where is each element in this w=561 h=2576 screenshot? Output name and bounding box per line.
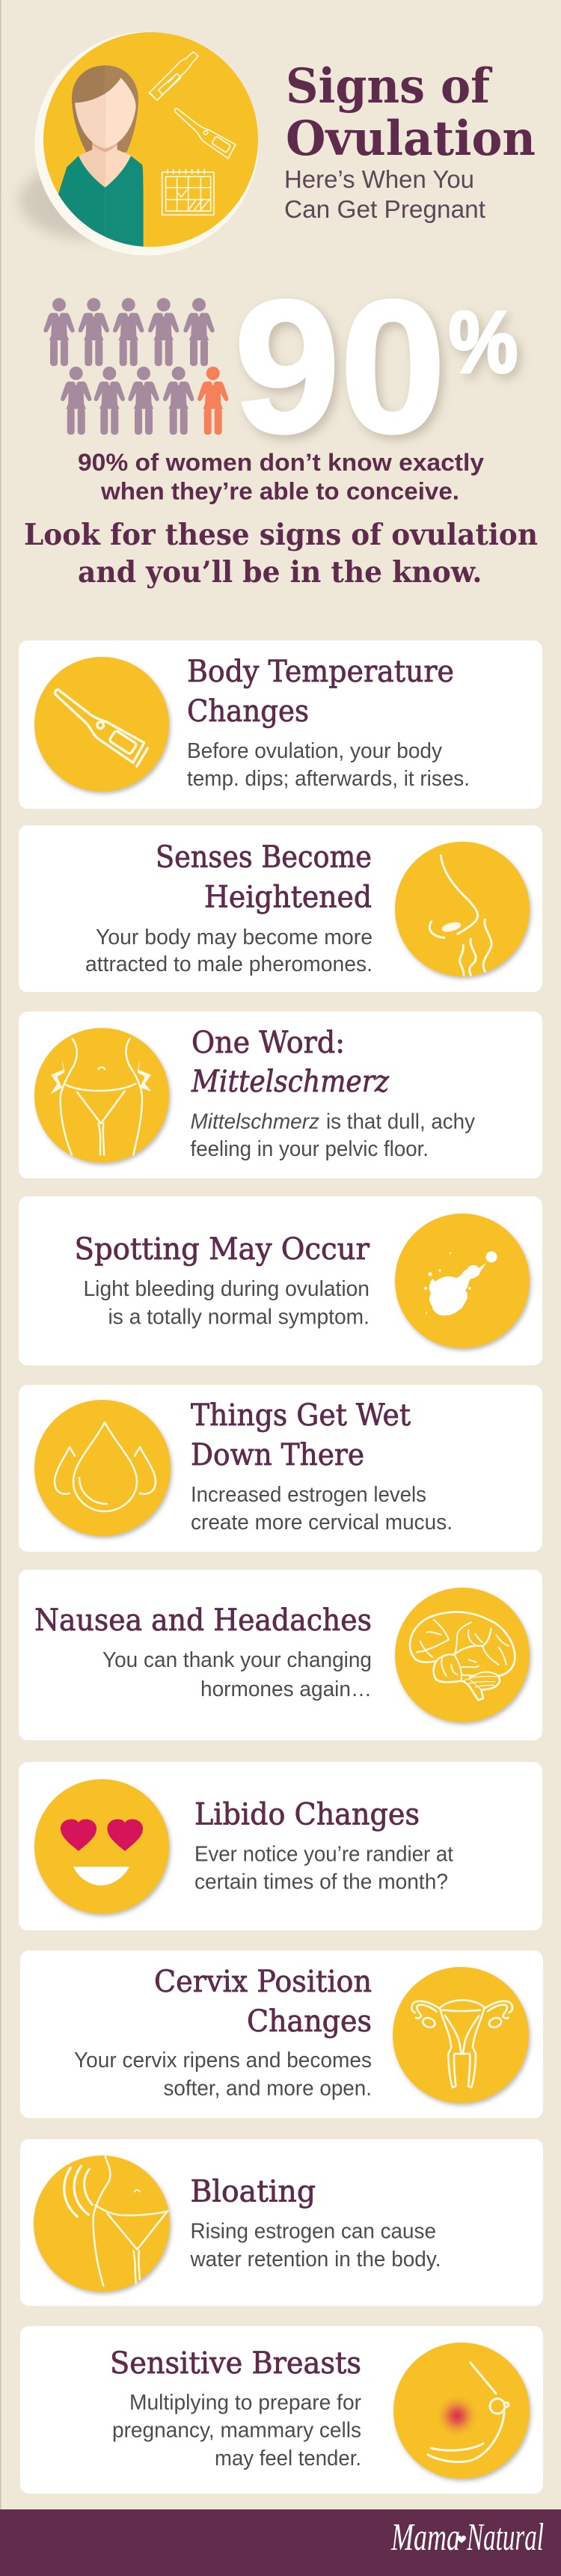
- description: Increased estrogen levels: [191, 1483, 426, 1507]
- big statistic: 90%: 90: [234, 262, 446, 472]
- panel: bloating: [20, 2139, 543, 2306]
- panel: mittelschmerz: [19, 1012, 542, 1178]
- panel: spotting may occur: [19, 1196, 542, 1365]
- heading: Changes: [247, 2004, 372, 2039]
- heading: [187, 655, 454, 729]
- description: [187, 739, 470, 791]
- icon: thermometer: [175, 108, 236, 159]
- description: hormones again…: [200, 1677, 372, 1701]
- heading: Bloating: [190, 2174, 316, 2209]
- description: Before ovulation, your body: [187, 739, 442, 763]
- icon: breast with pain spot: [393, 2343, 530, 2479]
- description: [85, 926, 373, 976]
- panel: body temperature changes: [19, 640, 542, 809]
- panel: cervix position changes: [20, 1951, 543, 2118]
- description: temp. dips; afterwards, it rises.: [187, 767, 470, 791]
- title: [286, 58, 536, 167]
- panel: nausea and headaches: [19, 1570, 542, 1740]
- heading: Spotting May Occur: [75, 1232, 370, 1267]
- description: Light bleeding during ovulation: [84, 1277, 370, 1301]
- description: Your cervix ripens and becomes: [74, 2049, 372, 2072]
- icon: calendar: [162, 170, 214, 215]
- heading: Heightened: [204, 880, 372, 914]
- icon: uterus: [393, 1967, 529, 2103]
- description: [84, 1277, 370, 1329]
- heading: Body Temperature: [187, 655, 454, 689]
- icon: heart-eyes emoji: [34, 1779, 169, 1914]
- icon: abdomen with pain marks: [34, 1028, 169, 1163]
- icon: nose: [395, 842, 530, 976]
- description: [194, 1842, 453, 1894]
- icon: water drops: [34, 1400, 171, 1536]
- description: Rising estrogen can cause: [190, 2219, 436, 2243]
- description: water retention in the body.: [190, 2248, 441, 2271]
- subtitle: Can Get Pregnant: [284, 195, 485, 223]
- description: create more cervical mucus.: [191, 1511, 453, 1535]
- panel: libido changes: [19, 1762, 542, 1930]
- heading: Senses Become: [156, 840, 372, 875]
- icon: side view of bloated abdomen: [34, 2156, 170, 2292]
- heading: Nausea and Headaches: [34, 1603, 372, 1638]
- description: softer, and more open.: [163, 2077, 372, 2101]
- statistic description: 90% of women don’t know exactly: [78, 449, 484, 476]
- description: certain times of the month?: [194, 1870, 448, 1894]
- icon: thermometer: [34, 657, 169, 792]
- heading: Mittelschmerz: [191, 1065, 390, 1099]
- description: feeling in your pelvic floor.: [190, 1137, 429, 1161]
- pictogram: ten women, one highlighted: [43, 298, 228, 435]
- description: Ever notice you’re randier at: [194, 1842, 453, 1866]
- heading: [191, 1398, 411, 1472]
- icon: pregnancy test: [149, 52, 198, 100]
- woman figure: [58, 52, 236, 252]
- heading: Libido Changes: [194, 1797, 420, 1832]
- heading: Cervix Position: [154, 1965, 372, 1999]
- heading: Down There: [191, 1438, 364, 1472]
- icon: brain: [395, 1588, 530, 1722]
- description: [102, 1648, 372, 1701]
- subtitle: [284, 165, 485, 223]
- panel: things get wet down there: [19, 1385, 542, 1552]
- description: [190, 2219, 441, 2271]
- title: Signs of: [286, 58, 492, 114]
- icon: blood splatter: [395, 1214, 530, 1348]
- description: [74, 2049, 372, 2101]
- footer band: [0, 2509, 561, 2576]
- description: is that dull, achy: [326, 1110, 475, 1134]
- title: Ovulation: [286, 111, 536, 167]
- description: pregnancy, mammary cells: [112, 2418, 361, 2442]
- description: is a totally normal symptom.: [108, 1305, 370, 1329]
- description: [112, 2391, 361, 2471]
- description: may feel tender.: [215, 2447, 361, 2471]
- description: attracted to male pheromones.: [85, 952, 373, 976]
- heading: Things Get Wet: [191, 1398, 411, 1433]
- heading: Changes: [187, 694, 309, 729]
- statistic description: [78, 449, 484, 504]
- panel: senses become heightened: [19, 825, 542, 992]
- intro heading: [24, 518, 538, 590]
- statistic description: when they’re able to conceive.: [100, 477, 459, 504]
- description: Mittelschmerz: [190, 1110, 319, 1134]
- subtitle: Here’s When You: [284, 165, 474, 193]
- logo: Mama Natural: [390, 2516, 544, 2559]
- heading: [191, 1026, 390, 1099]
- description: [190, 1110, 475, 1161]
- logo: Mama Natural: Mama: [390, 2516, 460, 2559]
- description: Your body may become more: [96, 926, 373, 949]
- description: Multiplying to prepare for: [129, 2391, 361, 2415]
- intro heading: Look for these signs of ovulation: [24, 518, 538, 552]
- intro heading: and you’ll be in the know.: [78, 555, 482, 590]
- description: You can thank your changing: [102, 1648, 372, 1672]
- heading: One Word:: [191, 1026, 345, 1060]
- heading: Sensitive Breasts: [110, 2346, 361, 2381]
- heading: [156, 840, 372, 914]
- big statistic: 90%: %: [449, 293, 518, 391]
- header illustration: woman in yellow circle: [19, 31, 259, 256]
- description: [191, 1483, 453, 1535]
- heading: [154, 1965, 372, 2039]
- panel: sensitive breasts: [20, 2326, 543, 2494]
